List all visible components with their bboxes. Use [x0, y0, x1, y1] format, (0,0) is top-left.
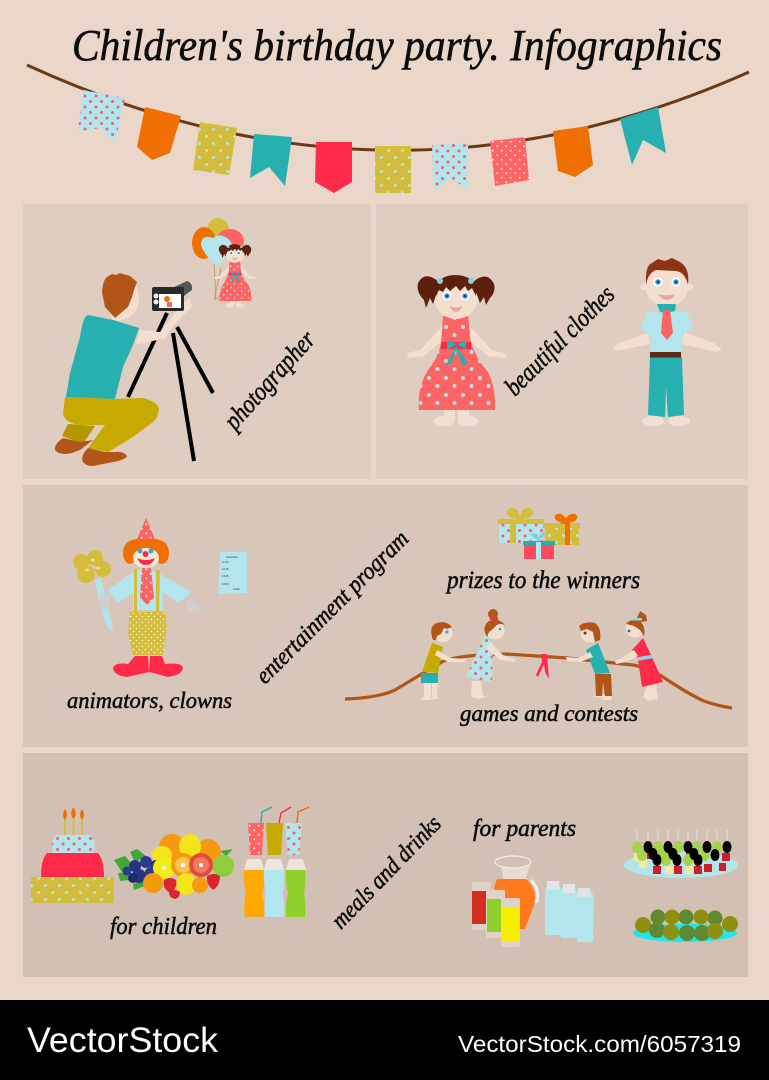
illustration: clown [73, 518, 200, 677]
label: beautiful clothes: beautiful clothes [499, 280, 620, 401]
illustration: cups with straws [248, 807, 309, 855]
illustration: photographer man [55, 273, 192, 466]
panel: meals and drinks [23, 753, 748, 977]
illustration: pitcher [494, 856, 538, 929]
watermark url: VectorStock.com/6057319 [458, 1031, 741, 1057]
illustration: juice glasses [472, 882, 520, 947]
schedule sheet: Finish [233, 587, 240, 591]
illustration: olive platter [633, 910, 738, 942]
icon: gift boxes [498, 506, 580, 559]
rope [345, 654, 732, 708]
schedule sheet [218, 552, 247, 594]
schedule sheet: 13:25 [222, 574, 229, 578]
footer watermark bar [0, 1000, 769, 1080]
boy right [566, 622, 612, 700]
label: entertainment program: entertainment program [251, 526, 414, 689]
schedule sheet: 12:15 [222, 567, 229, 571]
label: meals and drinks: meals and drinks [327, 811, 447, 934]
panel: photographer [23, 204, 371, 479]
illustration: tug of war [345, 609, 732, 708]
watermark brand: VectorStock [27, 1020, 218, 1060]
label: animators, clowns: animators, clowns [67, 688, 232, 713]
panel: entertainment program [23, 485, 748, 747]
label: photographer: photographer [217, 324, 322, 436]
label: for parents: for parents [473, 816, 576, 842]
illustration: girl in dress [407, 275, 507, 426]
girl left [466, 609, 516, 699]
schedule sheet: 15:00 [222, 582, 229, 586]
title: Children's birthday party. Infographics [72, 21, 722, 70]
boy left [420, 622, 466, 700]
illustration: fruit pile [114, 834, 234, 899]
illustration: small girl being photographed [214, 244, 256, 308]
schedule sheet: 11:30 [222, 560, 229, 564]
tripod [128, 313, 213, 461]
illustration: boy in shirt and tie [613, 258, 722, 426]
girl right [615, 611, 663, 701]
illustration: children's bottles [244, 859, 306, 917]
ribbon [536, 654, 549, 679]
bunting garland [27, 65, 749, 193]
illustration: water bottles [545, 881, 594, 942]
label: for children: for children [110, 914, 217, 940]
illustration: canape platter [624, 830, 738, 878]
panel: beautiful clothes [376, 204, 748, 479]
schedule sheet: Schedule [226, 555, 238, 559]
illustration: birthday cake [31, 807, 114, 903]
icon: balloons [192, 218, 244, 300]
label: prizes to the winners: prizes to the winners [445, 567, 640, 594]
label: games and contests: games and contests [460, 701, 638, 726]
